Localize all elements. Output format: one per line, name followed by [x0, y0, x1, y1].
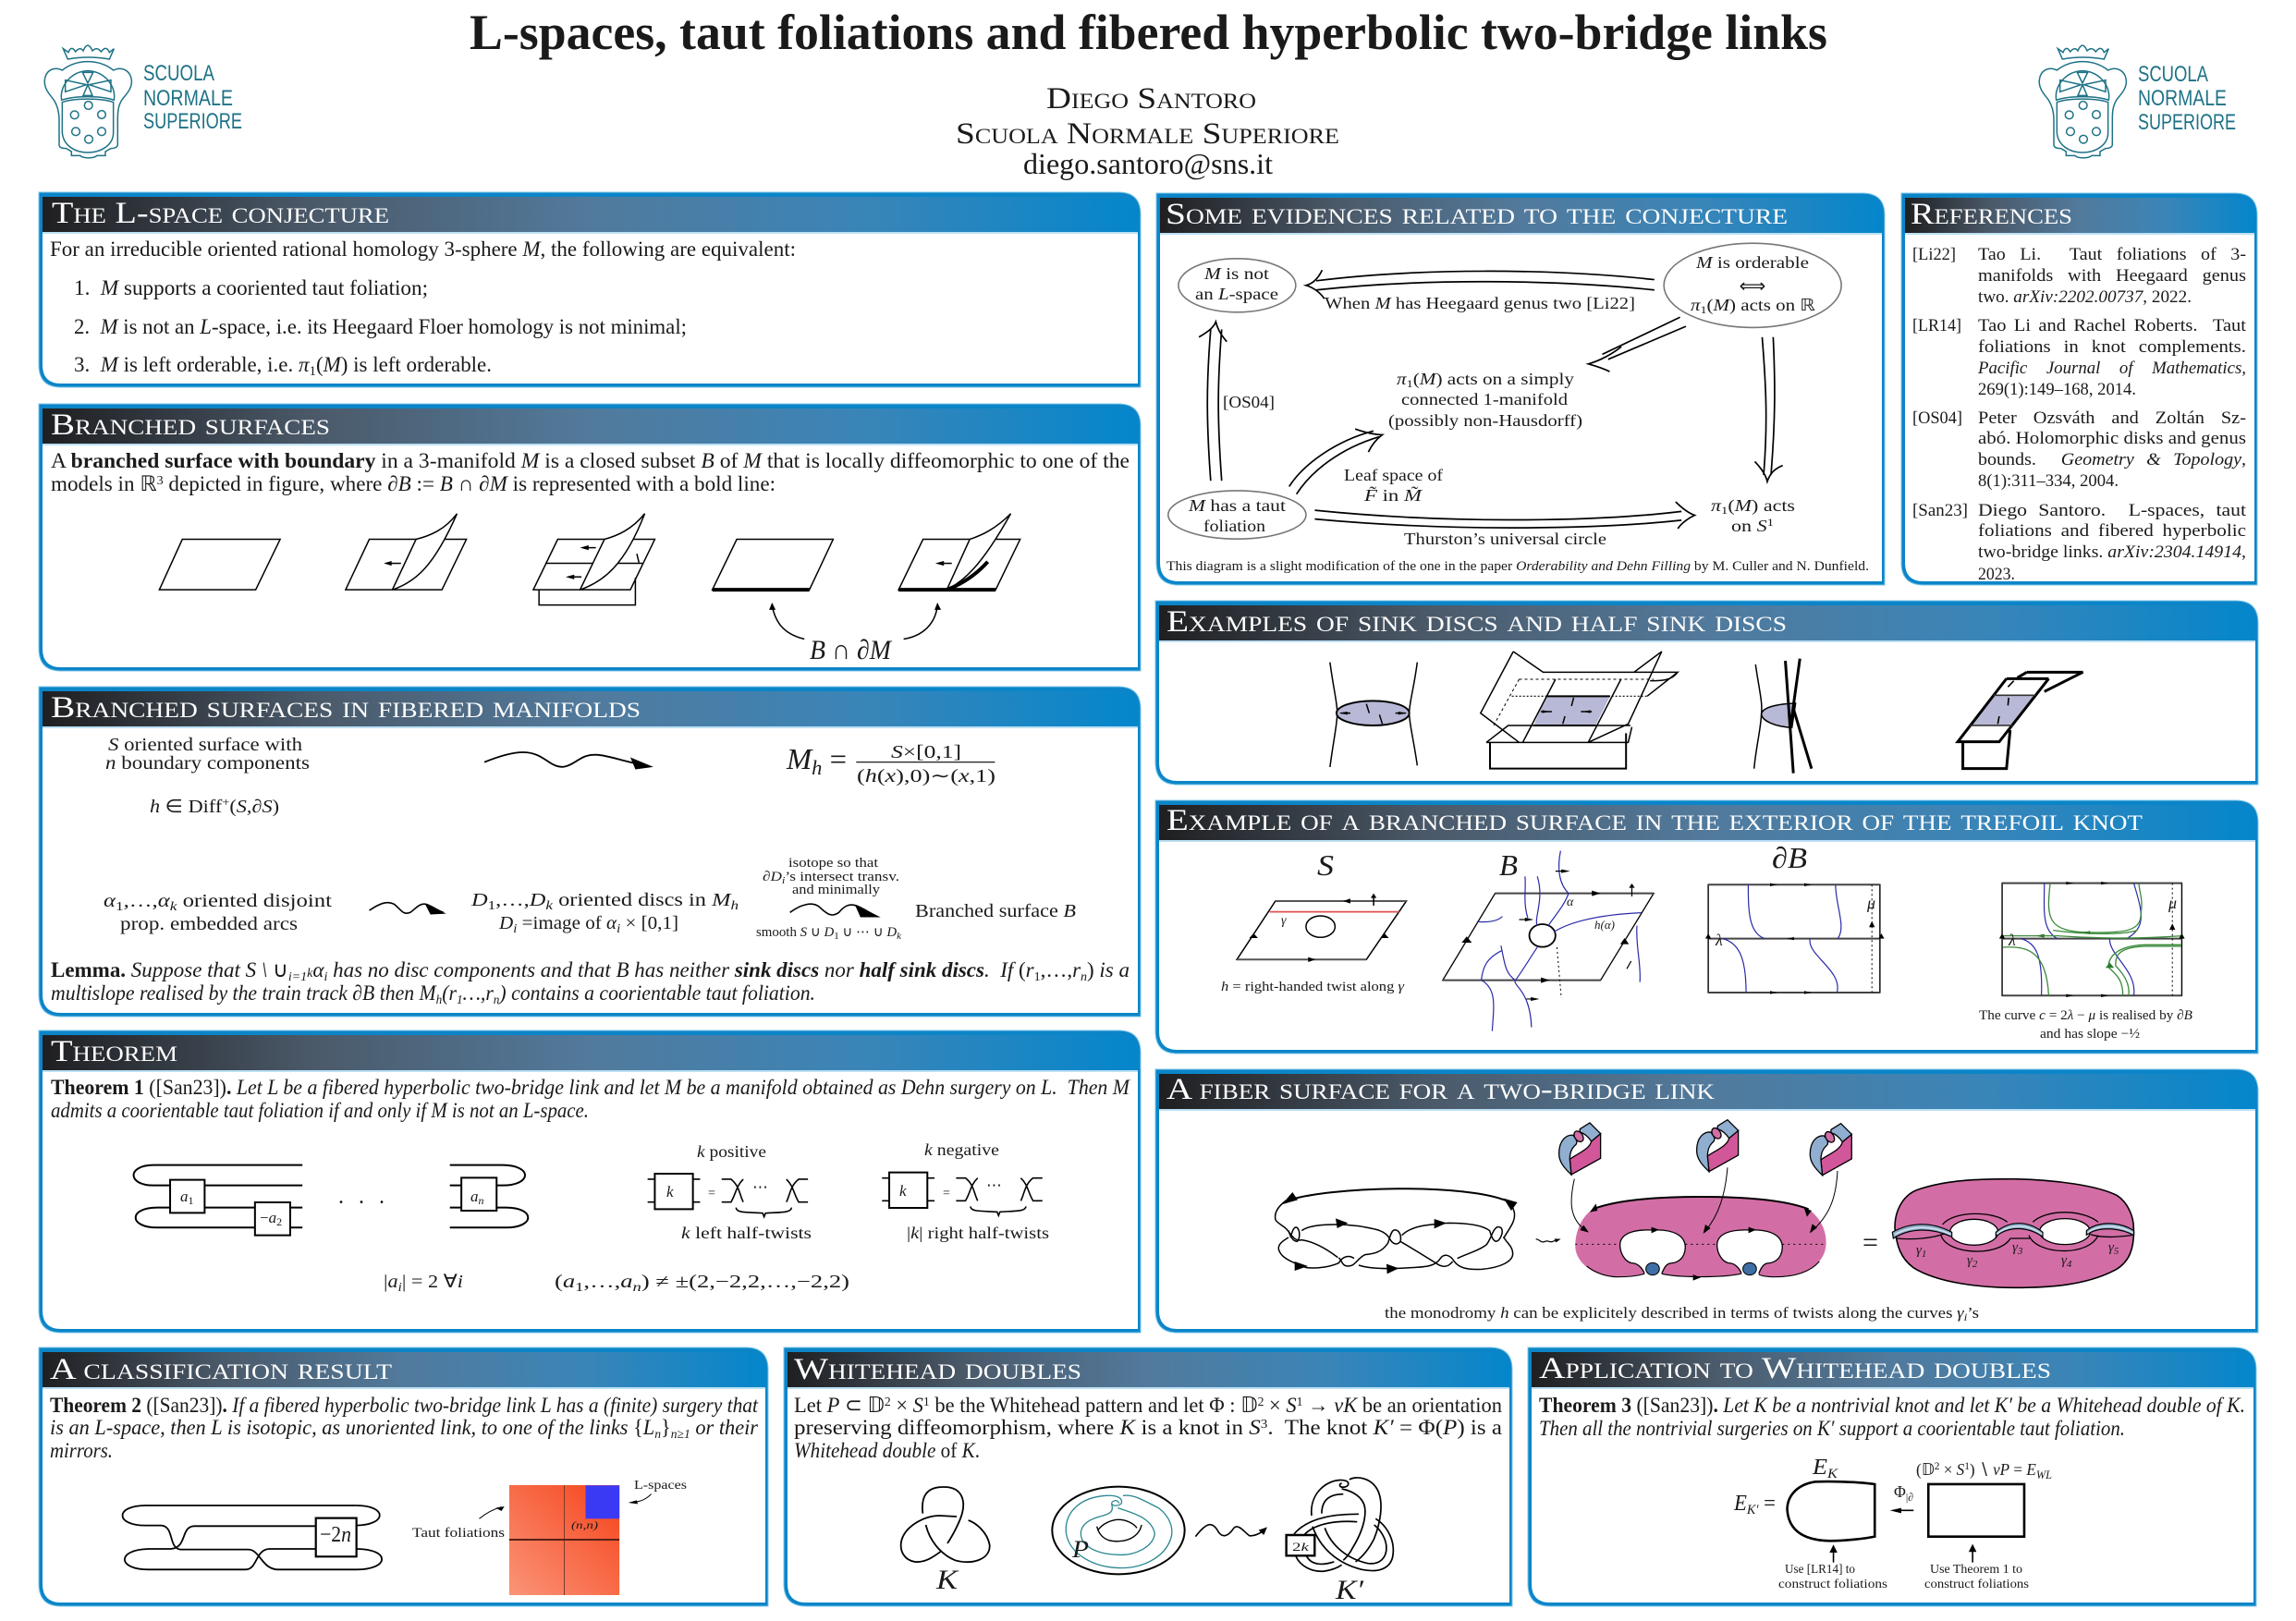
label K': K′	[1335, 1575, 1363, 1605]
definition: 2	[885, 1396, 891, 1409]
reference OS04: abó. Holomorphic disks and genus	[1978, 429, 2246, 448]
lemma line 2: h	[436, 993, 442, 1007]
figure: half sink disc 2	[1958, 672, 2082, 769]
reference LR14	[1912, 316, 2247, 399]
item 1: 1. M supports a cooriented taut foliation;	[74, 276, 428, 299]
monodromy: +	[222, 795, 229, 809]
condition on a_i: |a	[384, 1272, 397, 1292]
figure: curve c realised	[1999, 882, 2185, 997]
label exterior of Whitehead link: 2	[1935, 1459, 1939, 1472]
curve labels gamma 1 to 5: 4	[2067, 1259, 2072, 1270]
lemma: i	[324, 970, 327, 984]
panel: theorem	[39, 1030, 1141, 1333]
label S: S	[1317, 848, 1334, 882]
label E_K: K	[1826, 1467, 1838, 1481]
reference San23: Diego Santoro. L-spaces, taut	[1978, 501, 2247, 520]
label exterior of Whitehead link: ) ∖	[1970, 1460, 1993, 1480]
dots negative: ⋯	[986, 1176, 1002, 1194]
heading: Application to Whitehead doubles	[1539, 1352, 2051, 1385]
node: M has a taut foliation: M has a taut	[1188, 496, 1286, 515]
isotopy note line 2: i	[782, 875, 785, 886]
label: L-spaces: L-spaces	[634, 1479, 687, 1493]
node: line 2: on S	[1731, 517, 1765, 535]
arcs description: 1	[116, 900, 124, 914]
isotopy note line 2: ’s intersect transv.	[785, 870, 899, 884]
figure: link L_n	[123, 1505, 382, 1569]
box label a1: 1	[189, 1194, 194, 1207]
k positive label: k positive	[697, 1142, 766, 1161]
figure: Whitehead pattern P	[1052, 1487, 1185, 1574]
theorem 2 line 2: is an L-space, then L is isotopic, as unoriented link, to one of the links {L	[50, 1416, 655, 1439]
discs description: 1	[488, 899, 495, 913]
arcs description: ,…,	[124, 891, 158, 911]
label exterior of Whitehead link: ×	[1939, 1460, 1957, 1479]
lemma: sink discs nor half sink discs. If (r	[735, 958, 1034, 981]
node: acts on 1-manifold: M) acts on a simply	[1420, 370, 1553, 388]
node: acts on circle: (	[1728, 496, 1735, 516]
panel: references	[1901, 193, 2257, 585]
curve labels gamma 1 to 5: 1	[1922, 1249, 1926, 1260]
label exterior of Whitehead link: WL	[2036, 1468, 2052, 1481]
label 2k: 2k	[1292, 1540, 1309, 1554]
figure: sink disc 2	[1481, 652, 1678, 769]
condition on a_i: i	[398, 1281, 402, 1295]
logo: Scuola Normale Superiore left: SUPERIORE	[143, 109, 242, 134]
discs description: h	[730, 899, 739, 913]
figure: two-bridge link	[1276, 1188, 1518, 1274]
panel: branched surfaces	[39, 404, 1141, 671]
arcs description line 2: prop. embedded arcs	[120, 914, 298, 934]
figure: sink disc 1	[1330, 663, 1417, 767]
condition on a_i: i	[458, 1272, 463, 1292]
definition line 2: preserving diffeomorphism, where K is a knot in S	[794, 1416, 1260, 1439]
reference OS04: bounds. Geometry & Topology ,	[1978, 450, 2246, 469]
label exterior of Whitehead link: S	[1957, 1460, 1964, 1479]
arrow label: universal circle: Thurston’s universal circle	[1404, 530, 1606, 548]
arcs description: α	[104, 891, 116, 911]
discs description: ,…,	[495, 890, 530, 910]
title: L-spaces, taut foliations and fibered hyperbolic two-bridge links	[470, 5, 1827, 60]
item 3: 1	[309, 364, 316, 379]
definition text line 2: depicted in figure, where	[164, 472, 387, 495]
lemma: )	[1087, 958, 1094, 981]
lemma line 2: ) contains a coorientable taut foliation.	[498, 981, 815, 1005]
curve labels gamma 1 to 5: γ	[2108, 1240, 2114, 1255]
node: M is orderable: M is orderable	[1695, 253, 1809, 272]
arcs description: k	[170, 900, 177, 914]
definition: ×	[1264, 1394, 1286, 1417]
caption: i	[1964, 1310, 1967, 1323]
node: equivalence: ⟺	[1740, 274, 1765, 297]
node: acts on circle: π	[1711, 496, 1722, 515]
theorem 2 line 2: n≥1	[671, 1428, 690, 1442]
figure: local models	[159, 514, 1020, 640]
curve labels gamma 1 to 5: γ	[2061, 1253, 2067, 1268]
label B: B	[1499, 848, 1518, 882]
arrow: wavy	[1536, 1238, 1561, 1242]
smoothing note: D	[885, 925, 897, 940]
figure: Whitehead double K'	[1287, 1478, 1393, 1571]
monodromy: (	[229, 797, 237, 817]
box label an: a	[470, 1188, 479, 1205]
node: line 3: (possibly non-Hausdorff)	[1388, 411, 1582, 431]
theorem 3 statement: Theorem 3 ([San23]). Let K be a nontrivial knot and let K′ be a Whitehead double of K.	[1539, 1394, 2245, 1417]
node: acts on circle: M) acts	[1735, 496, 1787, 515]
reference LR14: [LR14]	[1912, 316, 1961, 335]
curve labels gamma 1 to 5: 2	[1972, 1259, 1978, 1270]
node: M is not an L-space: M is not	[1203, 264, 1269, 283]
label E_K': K′	[1746, 1503, 1759, 1517]
figure: surface with curves gamma	[1892, 1179, 2134, 1287]
reference Li22: Tao Li. Taut foliations of 3-	[1978, 245, 2246, 264]
definition text: A branched surface with boundary in a 3-manifold M is a closed subset B of M that is locally diffeomorphic to one of the	[51, 449, 1130, 472]
arrow label: genus two: When M has Heegaard genus two [Li22]	[1325, 294, 1635, 312]
chart: surgery square	[479, 1485, 652, 1595]
reference OS04: 8(1):311–334, 2004.	[1978, 471, 2119, 491]
lemma: k	[307, 967, 313, 981]
branched surface result: Branched surface B	[915, 901, 1076, 921]
discs description: D	[529, 890, 546, 910]
figure: two-bridge link diagram	[134, 1165, 528, 1236]
reference OS04: Peter Ozsváth and Zoltán Sz-	[1978, 408, 2246, 428]
node: acts on R: 1	[1701, 303, 1707, 316]
theorem 2 line 3: mirrors.	[50, 1439, 113, 1462]
smoothing note: smooth S ∪ D	[756, 925, 834, 940]
formula for mapping torus: M	[786, 742, 814, 775]
node: acts on 1-manifold: (	[1413, 370, 1420, 389]
reference Li22: manifolds with Heegaard genus	[1978, 266, 2246, 286]
note: construct foliations: construct foliations	[1924, 1578, 2029, 1591]
definition: ×	[891, 1394, 913, 1417]
reference Li22	[1912, 245, 2246, 307]
condition on a_i: | = 2 ∀	[402, 1272, 458, 1292]
discs description: k	[545, 899, 554, 913]
lemma: ,…,	[1041, 958, 1072, 981]
definition: S	[1286, 1394, 1297, 1417]
node: acts on 1-manifold: π	[1397, 370, 1408, 388]
note: construct foliations: construct foliations	[1778, 1578, 1887, 1591]
figure: train track boundary B	[1705, 884, 1885, 994]
heading: Theorem	[51, 1035, 177, 1068]
node: acts on circle: 1	[1721, 504, 1728, 517]
discs description line 2: i	[513, 922, 517, 936]
logo: Scuola Normale Superiore right	[2039, 45, 2236, 158]
k negative label: k negative	[924, 1140, 999, 1159]
isotopy note line 3: and minimally	[792, 883, 881, 897]
formula for mapping torus: =	[822, 742, 847, 775]
author name: Diego Santoro	[1046, 82, 1256, 116]
lemma: α	[312, 958, 324, 981]
heading: Whitehead doubles	[794, 1353, 1081, 1386]
panel: a fiber surface for a two-bridge link	[1155, 1069, 2258, 1333]
definition text line 2: ∂B := B ∩ ∂M is represented with a bold line:	[387, 472, 775, 495]
k in negative box: k	[899, 1182, 907, 1200]
reference San23: [San23]	[1912, 501, 1968, 520]
monodromy: h ∈ Diff	[150, 797, 216, 817]
panel: application to Whitehead doubles	[1528, 1347, 2256, 1606]
heading: A classification result	[50, 1353, 392, 1386]
smoothing note: ∪ ⋯ ∪	[839, 925, 886, 940]
heading: Examples of sink discs and half sink discs	[1166, 605, 1787, 639]
curve labels gamma 1 to 5: γ	[1967, 1253, 1972, 1268]
heading: References	[1911, 198, 2072, 231]
logo: Scuola Normale Superiore right: SUPERIORE	[2138, 110, 2236, 135]
note: use LR14: Use [LR14] to	[1785, 1563, 1855, 1577]
theorem 2 line 2: or their	[690, 1416, 759, 1439]
label exterior of Whitehead link: (𝔻	[1916, 1460, 1936, 1479]
isotopy note line 2: ∂D	[763, 870, 782, 884]
node: acts on R: (	[1707, 296, 1714, 315]
definition: →	[1302, 1394, 1334, 1417]
label h(alpha): h(α)	[1594, 918, 1615, 932]
exclusion condition: ) ≠ ±(2,−2,2,…,−2,2)	[641, 1272, 849, 1292]
figure: half sink disc 1	[1754, 659, 1812, 774]
lemma: r	[1072, 958, 1081, 981]
definition: 1	[923, 1396, 930, 1409]
lemma line 2: 1	[457, 993, 463, 1007]
reference San23: 2023.	[1978, 565, 2015, 584]
theorem 2 statement: Theorem 2 ([San23]). If a fibered hyperbolic two-bridge link L has a (finite) surgery that	[50, 1394, 759, 1417]
item 3: M) is left orderable.	[324, 353, 492, 376]
label boundary B: ∂B	[1772, 841, 1807, 874]
node: line 2: foliation	[1203, 517, 1265, 535]
item 3: (	[316, 353, 324, 376]
figure: branched surface B	[1443, 851, 1654, 1031]
right half-twists label: |k| right half-twists	[907, 1224, 1049, 1242]
exclusion condition: 1	[575, 1281, 583, 1295]
fraction denominator: (h(x),0)∼( x,1)	[857, 766, 995, 786]
theorem 3 line 2: Then all the nontrivial surgeries on K′ support a coorientable taut foliation.	[1539, 1417, 2125, 1440]
formula for mapping torus: h	[812, 756, 822, 779]
figure: gluing diagram	[1788, 1481, 2024, 1563]
definition: 2	[1258, 1396, 1264, 1409]
discs description: D	[470, 890, 488, 910]
twist box diagrams	[648, 1173, 1043, 1217]
arrow label: leaf space: Leaf space of	[1344, 466, 1443, 484]
left half-twists label: k left half-twists	[681, 1224, 812, 1242]
panel: a classification result	[39, 1347, 768, 1606]
discs description line 2: D	[498, 913, 514, 933]
figure: pink surface	[1571, 1167, 1838, 1281]
label: taut foliations: Taut foliations	[412, 1526, 505, 1541]
reference LR14: Pacific Journal of Mathematics,	[1977, 359, 2246, 378]
surface description: S oriented surface with	[108, 735, 302, 755]
label gamma: γ	[1281, 914, 1287, 928]
arrow: wavy	[1195, 1525, 1267, 1537]
caption: ’s	[1967, 1304, 1979, 1322]
label mu right: μ	[2168, 894, 2177, 912]
caption: right-handed twist: h = right-handed twist along γ	[1221, 980, 1405, 994]
label exterior of Whitehead link: νP = E	[1993, 1460, 2036, 1479]
note: use theorem 1: Use Theorem 1 to	[1930, 1563, 2022, 1577]
exclusion condition: a	[620, 1272, 633, 1292]
heading: Branched surfaces in fibered manifolds	[51, 691, 641, 725]
panel: some evidences related to the conjecture	[1156, 193, 1885, 585]
statement: For an irreducible oriented rational homology 3-sphere M, the following are equivalent:	[50, 238, 796, 261]
node: acts on R: M) acts on ℝ	[1714, 296, 1803, 314]
arrows: wavy	[370, 752, 995, 918]
curve labels gamma 1 to 5: γ	[2012, 1240, 2018, 1255]
label mu: μ	[1866, 894, 1875, 912]
lemma: n	[1081, 970, 1087, 984]
definition: νK be an orientation	[1334, 1394, 1506, 1417]
node: line 2: an L-space	[1195, 285, 1278, 303]
definition line 2: . The knot	[1267, 1416, 1374, 1439]
label Phi restricted to boundary: Φ	[1894, 1482, 1906, 1501]
surface description line 2: n boundary components	[105, 753, 310, 774]
exclusion condition: (a	[555, 1272, 572, 1292]
reference San23: two-bridge links. arXiv:2304.14914 ,	[1978, 542, 2246, 562]
node: line 2: 1	[1767, 516, 1774, 529]
discs description: oriented discs in	[553, 890, 712, 910]
lemma: Lemma. Suppose that S \ ∪	[51, 958, 288, 981]
logo: Scuola Normale Superiore left: SCUOLA	[143, 61, 214, 86]
lemma: is a	[1094, 958, 1130, 981]
label E_K': E	[1733, 1492, 1747, 1516]
arcs description: oriented disjoint	[177, 891, 333, 911]
affiliation: Scuola Normale Superiore	[956, 117, 1339, 151]
discs description line 2: α	[606, 913, 617, 933]
discs description: M	[711, 890, 732, 910]
definition line 2: K′ = Φ(P) is a	[1374, 1416, 1498, 1439]
label: (n,n): (n,n)	[571, 1518, 598, 1531]
logo: Scuola Normale Superiore right: NORMALE	[2138, 86, 2227, 111]
label lambda: λ	[1715, 931, 1723, 949]
heading: Example of a branched surface in the exterior of the trefoil knot	[1166, 804, 2143, 837]
discs description line 2: =image of	[517, 913, 606, 933]
email: diego.santoro@sns.it	[1023, 147, 1273, 180]
reference OS04	[1912, 408, 2246, 491]
definition line 3: Whitehead double of K.	[794, 1439, 980, 1462]
fraction numerator: S×[0,1]	[891, 742, 961, 762]
label exterior of Whitehead link: 1	[1964, 1459, 1970, 1472]
caption: the monodromy h can be explicitely described in terms of twists along the curves γ	[1385, 1304, 1963, 1322]
smoothing note: 1	[834, 931, 839, 942]
box label -a2: 2	[276, 1215, 282, 1228]
lemma line 2: n	[494, 993, 499, 1007]
panel: examples of sink discs	[1155, 601, 2258, 785]
label: B intersect boundary M: B ∩ ∂M	[810, 635, 893, 665]
arrow label: line 2: F̃ in M̃	[1363, 486, 1423, 505]
reference LR14: 269(1):149–168, 2014.	[1978, 380, 2136, 399]
definition: be the Whitehead pattern and let Φ : 𝔻	[930, 1394, 1258, 1417]
lemma: has no disc components and that B has neither	[327, 958, 735, 981]
heading: A fiber surface for a two-bridge link	[1166, 1073, 1715, 1106]
caption: slope: and has slope −½	[2040, 1027, 2140, 1042]
definition: S	[913, 1394, 923, 1417]
smoothing note: k	[897, 931, 902, 942]
diagram: nodes and implication arrows	[1168, 243, 1841, 539]
curve labels gamma 1 to 5	[1916, 1240, 2119, 1270]
box label a1: a	[180, 1188, 189, 1205]
reference Li22: two. arXiv:2202.00737, 2022.	[1978, 287, 2192, 307]
definition text line 2: 3	[157, 474, 164, 488]
logo: Scuola Normale Superiore left: NORMALE	[143, 86, 233, 111]
curve labels gamma 1 to 5: γ	[1916, 1243, 1922, 1258]
item 2: 2. M is not an L-space, i.e. its Heegaard Floer homology is not minimal;	[74, 315, 687, 338]
equals negative: =	[943, 1187, 950, 1201]
reference LR14: Tao Li and Rachel Roberts. Taut	[1978, 316, 2247, 335]
discs description line 2: × [0,1]	[620, 913, 678, 933]
reference OS04: [OS04]	[1912, 408, 1962, 428]
definition: Let P ⊂ 𝔻	[794, 1394, 885, 1417]
theorem 2 line 2: }	[661, 1416, 671, 1439]
figure: surface S	[1237, 894, 1407, 962]
exclusion condition: ,…,	[583, 1272, 620, 1292]
item 3: 3. M is left orderable, i.e. π	[74, 353, 309, 376]
definition text line 2: models in ℝ	[51, 472, 156, 495]
logo: Scuola Normale Superiore left	[44, 45, 242, 158]
dots positive: ⋯	[752, 1178, 768, 1196]
theorem 1 statement: Theorem 1 ([San23]). Let L be a fibered hyperbolic two-bridge link and let M be a manifold obtained as Dehn surgery on L. Then M	[51, 1076, 1131, 1099]
heading: Branched surfaces	[51, 408, 330, 442]
reference San23	[1912, 501, 2247, 584]
label K: K	[935, 1565, 959, 1595]
isotopy note: isotope so that	[788, 856, 879, 871]
icons: local flaps	[1559, 1120, 1851, 1176]
heading: The L-space conjecture	[52, 197, 389, 230]
label Phi restricted to boundary: |∂	[1906, 1491, 1913, 1504]
label E_K: E	[1813, 1456, 1826, 1480]
arcs description: α	[158, 891, 170, 911]
lemma line 2: multislope realised by the train track ∂B then M	[51, 981, 458, 1005]
lemma line 2: …,r	[463, 981, 495, 1005]
label alpha: α	[1567, 896, 1574, 909]
discs description line 2: i	[617, 922, 620, 936]
lemma line 2: (r	[442, 981, 458, 1005]
equals and dots positive: =	[708, 1187, 715, 1201]
heading: Some evidences related to the conjecture	[1166, 198, 1788, 231]
node: line 2: connected 1-manifold	[1401, 390, 1568, 408]
monodromy: S,∂S)	[237, 797, 278, 817]
curve labels gamma 1 to 5: 3	[2017, 1246, 2023, 1257]
lemma: i=1	[288, 970, 307, 984]
caption: This diagram is a slight modification of the one in the paper Orderability and Dehn Filling by M. Culler and N. Dunfield.	[1166, 559, 1869, 574]
curve labels gamma 1 to 5: 5	[2114, 1246, 2119, 1257]
label P: P	[1071, 1536, 1089, 1563]
box label -a2: −a	[260, 1209, 276, 1226]
reference San23: foliations and fibered hyperbolic	[1978, 521, 2246, 541]
equals sign: =	[1862, 1227, 1878, 1258]
label lambda right: λ	[2008, 931, 2016, 949]
node: acts on 1-manifold: 1	[1407, 377, 1413, 390]
reference Li22: [Li22]	[1912, 245, 1956, 264]
panel: the L-space conjecture	[39, 192, 1141, 387]
figure: trefoil K	[901, 1487, 990, 1562]
theorem 2 line 2: n	[654, 1428, 661, 1442]
panel: branched surfaces in fibered manifolds	[39, 687, 1141, 1017]
arrow label: OS04: [OS04]	[1223, 393, 1275, 411]
theorem 1 statement line 2: admits a coorientable taut foliation if and only if M is not an L-space.	[51, 1099, 589, 1122]
caption: curve c: The curve c = 2λ − μ is realised by ∂B	[1979, 1008, 2192, 1023]
definition line 2: 3	[1261, 1418, 1267, 1432]
k in positive box: k	[666, 1183, 674, 1201]
reference LR14: foliations in knot complements.	[1978, 337, 2246, 357]
definition: 1	[1297, 1396, 1302, 1409]
box label an: n	[479, 1194, 484, 1207]
panel: example of a branched surface in trefoil exterior	[1155, 800, 2258, 1054]
box label -2n: −2n	[320, 1523, 351, 1547]
ellipsis: . . .	[338, 1185, 385, 1209]
node: acts on R: π	[1691, 296, 1702, 314]
logo: Scuola Normale Superiore right: SCUOLA	[2138, 62, 2208, 87]
label E_K': =	[1758, 1492, 1776, 1516]
lemma: 1	[1034, 970, 1041, 984]
panel: Whitehead doubles	[784, 1347, 1512, 1606]
exclusion condition: n	[633, 1281, 641, 1295]
